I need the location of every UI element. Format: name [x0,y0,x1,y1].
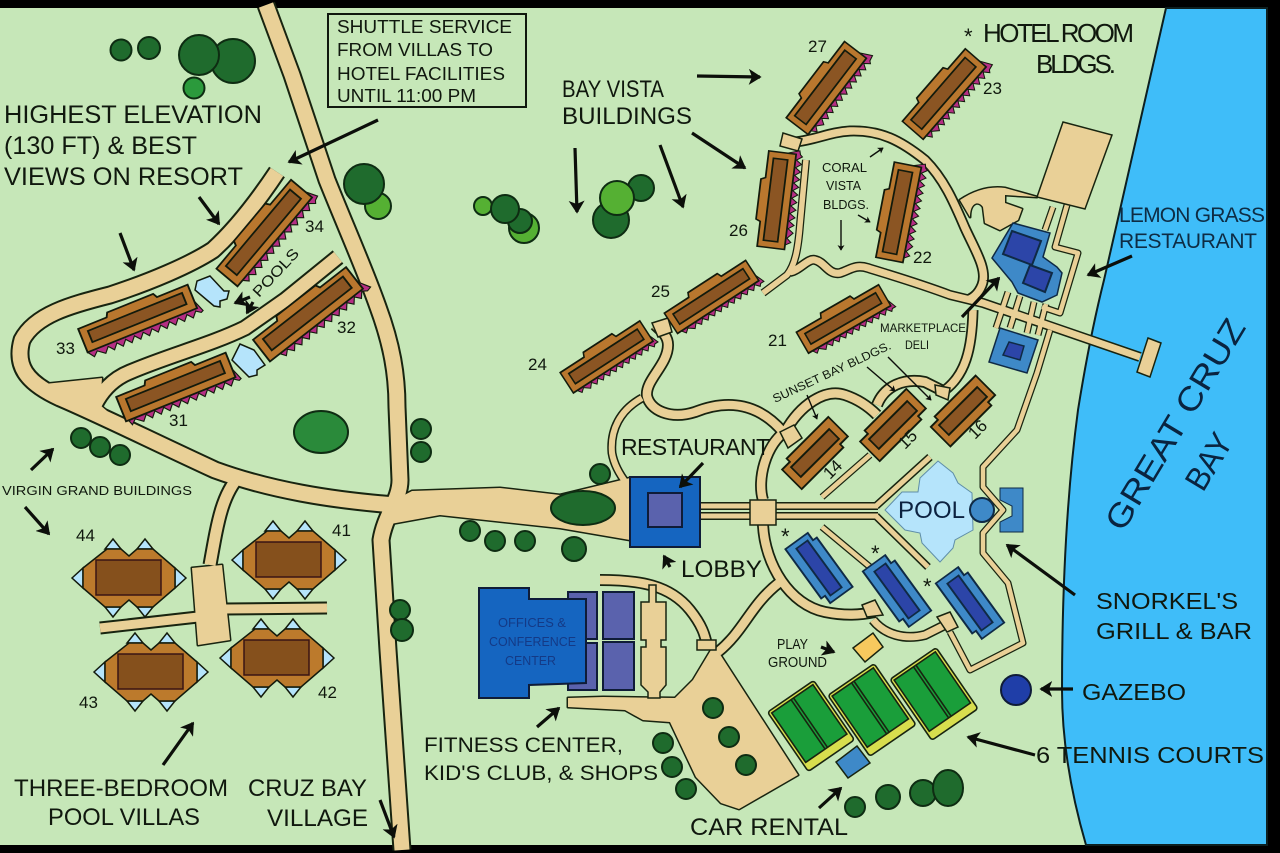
building numbers [56,37,1002,712]
villa 43 [94,633,208,711]
building numbers: 23 [983,79,1002,98]
label: hotel room buildings [964,18,1134,79]
building numbers: 24 [528,355,547,374]
building 32 [250,259,373,367]
label: Marketplace Deli [880,321,966,352]
hotel building asterisks [781,524,932,599]
hotel building A [785,530,853,606]
building numbers: 32 [337,318,356,337]
label: fitness center: KID'S CLUB, & SHOPS [424,762,658,785]
label: car rental: CAR RENTAL [690,814,848,841]
shuttle service box: FROM VILLAS TO [337,40,493,60]
label: Coral Vista buildings: VISTA [826,178,861,193]
junction squares and stubs [641,122,1161,698]
hillside plunge pools [195,276,265,377]
building numbers: 22 [913,248,932,267]
villa 42 [220,619,334,697]
building numbers: 25 [651,282,670,301]
building 25 [662,255,765,338]
building 24 [558,315,659,398]
label: lobby: LOBBY [681,556,762,583]
label: three-bedroom pool villas [14,775,228,831]
label: Lemon Grass Restaurant: RESTAURANT [1119,230,1257,253]
label: offices and conference center: OFFICES & [498,615,566,630]
label: Marketplace Deli: DELI [905,338,929,352]
court pair 1 [768,680,854,772]
label: offices and conference center: CONFERENCE [489,634,576,649]
building numbers: 44 [76,526,95,545]
Lemon Grass restaurant building [992,223,1062,302]
three-bedroom pool villas [72,521,346,711]
label: gazebo: GAZEBO [1082,679,1186,705]
building numbers: 41 [332,521,351,540]
hotel building asterisks: * [923,574,932,599]
building 23 [899,42,995,144]
label: playground: PLAY [777,636,808,653]
label: fitness center [424,734,658,785]
label: highest elevation: VIEWS ON RESORT [4,163,243,191]
villa 44 [72,539,186,617]
label: Virgin Grand buildings: VIRGIN GRAND BUILDINGS [2,483,192,498]
restaurant and lobby building [630,477,700,547]
building 33 [77,279,204,359]
building 22 [872,157,929,264]
label: hotel room buildings: HOTEL ROOM [983,18,1134,48]
label: 6 tennis courts: 6 TENNIS COURTS [1036,742,1264,768]
label: highest elevation: (130 FT) & BEST [4,132,197,160]
label: three-bedroom pool villas: THREE-BEDROOM [14,775,228,802]
court pair 2 [828,664,916,756]
label: fitness center: FITNESS CENTER, [424,734,623,757]
label: offices and conference center [489,615,576,668]
hotel building B [863,552,931,630]
label: Cruz Bay Village: CRUZ BAY [248,775,367,802]
building 15 [857,389,929,461]
building 31 [115,347,242,427]
tennis courts [768,648,978,772]
shuttle service box [328,14,526,107]
building 16 [928,376,998,446]
tree oval at lobby entry [551,491,615,525]
court pair 3 [890,648,978,740]
pier head [1137,338,1161,377]
label: Marketplace Deli: MARKETPLACE [880,321,966,335]
label: Coral Vista buildings: CORAL [822,160,867,175]
gazebo [1001,675,1031,705]
label: Snorkel's Grill and Bar: SNORKEL'S [1096,588,1238,614]
Snorkel's grill and bar [970,488,1023,532]
label: highest elevation [4,101,262,191]
building 14 [779,417,851,489]
trees [71,35,963,817]
main pool [885,461,973,562]
building numbers: 33 [56,339,75,358]
building 27 [783,34,875,138]
building numbers: 14 [819,456,846,483]
building numbers: 16 [964,416,991,443]
building numbers: 27 [808,37,827,56]
label: Bay Vista buildings: BUILDINGS [562,103,692,130]
label: Lemon Grass Restaurant: LEMON GRASS [1119,204,1265,227]
shuttle service box: UNTIL 11:00 PM [337,86,476,106]
label: offices and conference center: CENTER [505,653,556,668]
hotel building C [936,564,1004,642]
buildings: Sunset Bay 14 to 16 [779,376,998,489]
label: Sunset Bay buildings: SUNSET BAY BLDGS. [770,339,893,406]
label: playground [768,636,827,671]
label: three-bedroom pool villas: POOL VILLAS [48,804,200,831]
building 26 [753,147,803,250]
parking lot near Lemon Grass [1037,122,1112,209]
label: restaurant: RESTAURANT [621,434,770,460]
building numbers: 34 [305,217,324,236]
building numbers: 42 [318,683,337,702]
label: highest elevation: HIGHEST ELEVATION [4,101,262,129]
label: pools: POOLS [249,245,303,301]
car rental [836,746,870,778]
hotel building asterisks: * [781,524,790,549]
label: Snorkel's Grill and Bar [1096,588,1252,644]
playground [853,633,883,662]
label: Lemon Grass Restaurant [1119,204,1265,253]
label: hotel room buildings: * [964,24,973,49]
building 21 [794,279,897,358]
label: Cruz Bay Village [248,775,368,832]
label: Cruz Bay Village: VILLAGE [267,805,368,832]
building numbers: 21 [768,331,787,350]
building numbers: 15 [894,426,921,453]
offices and conference center [479,588,634,698]
label: Bay Vista buildings [562,76,692,130]
building 34 [213,173,320,291]
hotel building asterisks: * [871,541,880,566]
thin pointer arrows [807,148,931,419]
fitness walkway building [641,585,666,698]
label: Bay Vista buildings: BAY VISTA [562,76,664,103]
label: playground: GROUND [768,654,827,671]
label: pool: POOL [898,497,965,524]
marketplace deli building [989,328,1038,373]
label: Great Cruz Bay: GREAT CRUZ [1097,312,1253,537]
building numbers: 26 [729,221,748,240]
label: hotel room buildings: BLDGS. [1036,49,1116,79]
label: Coral Vista buildings: BLDGS. [823,197,869,212]
label: Coral Vista buildings [822,160,869,212]
shuttle service box: SHUTTLE SERVICE [337,17,512,37]
hotel room buildings (blue) [785,530,1004,642]
label: Great Cruz Bay: BAY [1177,426,1240,497]
building numbers: 43 [79,693,98,712]
shuttle service box: HOTEL FACILITIES [337,64,505,84]
buildings: hillside suites 21 to 34 [77,34,995,427]
arrows [25,76,1132,837]
label: Snorkel's Grill and Bar: GRILL & BAR [1096,618,1252,644]
water: Great Cruz Bay [1062,8,1267,845]
villa 41 [232,521,346,599]
building numbers: 31 [169,411,188,430]
